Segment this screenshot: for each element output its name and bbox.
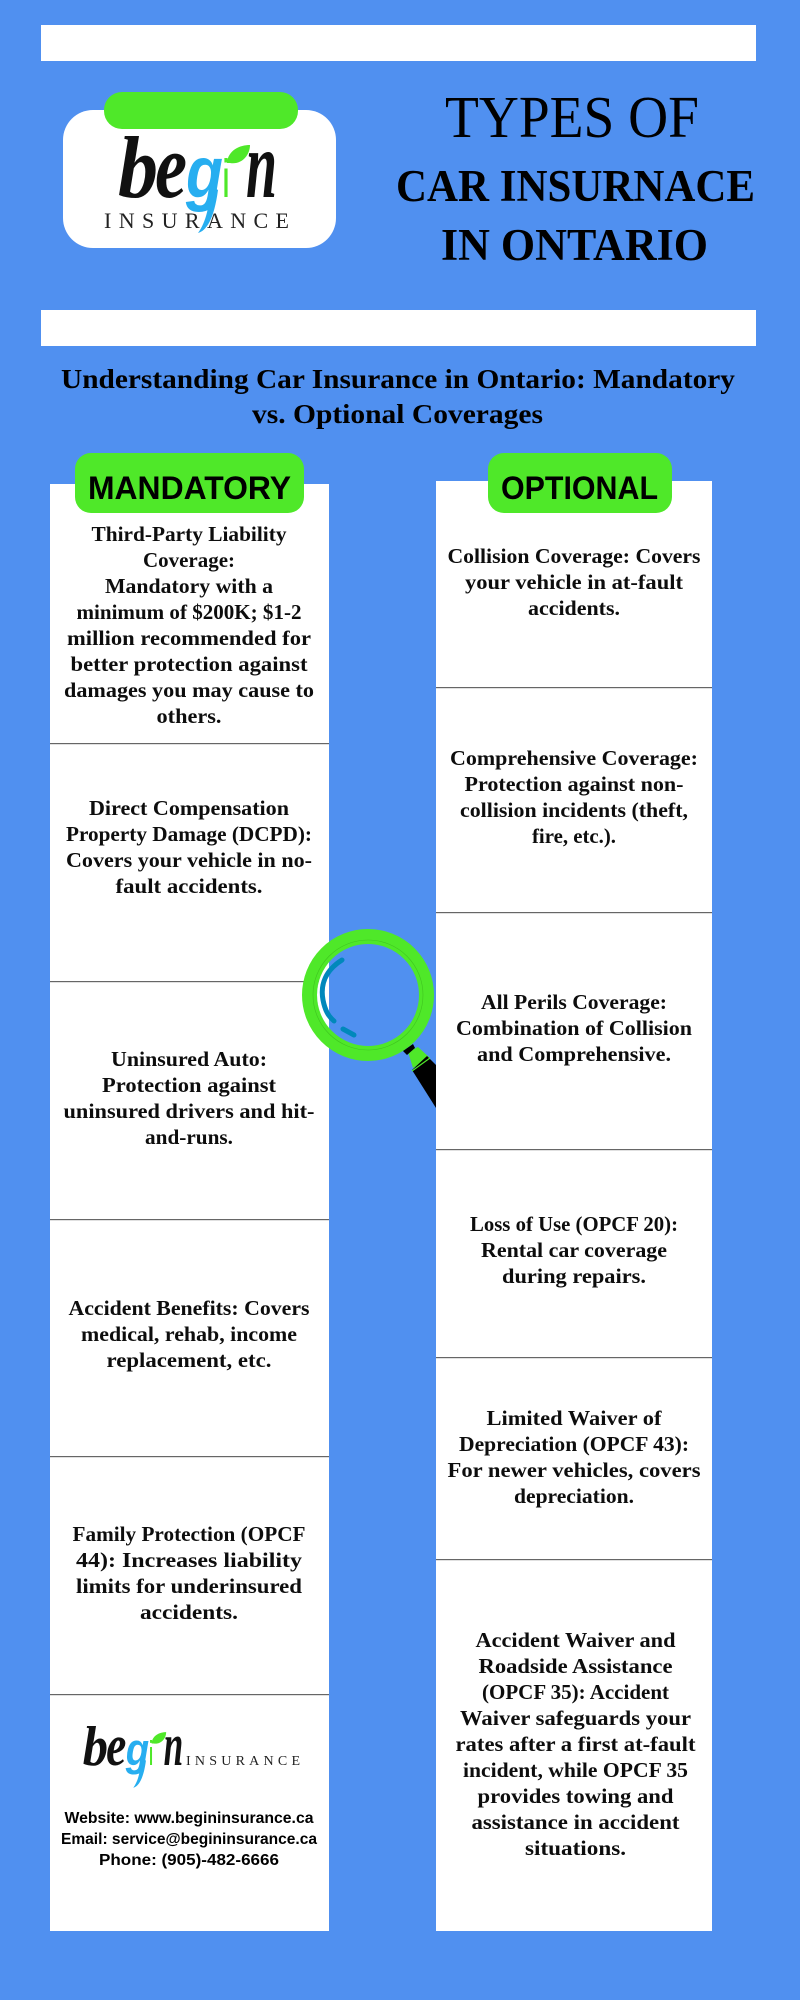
small logo: e (106, 1713, 126, 1778)
text: comprehensive: fire, etc.). (532, 824, 616, 848)
text: comprehensive: Comprehensive Coverage: (450, 746, 698, 770)
text: comprehensive: Protection against non- (464, 772, 684, 796)
text: accident benefits: replacement, etc. (106, 1348, 272, 1372)
lower white bar (41, 310, 756, 346)
icon: magnifying glass (310, 936, 436, 1108)
text: accident waiver and roadside: assistance in accident (472, 1810, 680, 1834)
logo: begin insurance: INSURANCE (104, 208, 289, 233)
text: accident waiver and roadside: rates after a first at-fault (456, 1732, 696, 1756)
text: third-party liability: Third-Party Liability (92, 522, 287, 546)
text: collision: accidents. (528, 596, 620, 620)
text: accident waiver and roadside: (OPCF 35): Accident (482, 1680, 670, 1704)
text: family protection: Family Protection (OPCF (72, 1522, 306, 1546)
logo: begin insurance: n (246, 112, 277, 218)
text: limited waiver: Limited Waiver of (486, 1406, 662, 1430)
text: accident waiver and roadside: Roadside Assistance (478, 1654, 672, 1678)
text: comprehensive: collision incidents (theft, (460, 798, 688, 822)
text: comprehensive (450, 746, 698, 848)
panel: optional (436, 453, 712, 1931)
logo: begin insurance: b (118, 120, 158, 217)
title (396, 84, 755, 270)
top white bar (41, 25, 756, 61)
panel: mandatory (50, 453, 329, 1931)
small logo: b (83, 1716, 108, 1778)
text: loss of use: Loss of Use (OPCF 20): (470, 1212, 678, 1236)
text: family protection: limits for underinsured (76, 1574, 302, 1598)
text: third-party liability: million recommended for (67, 626, 311, 650)
text: third-party liability: Mandatory with a (105, 574, 273, 598)
contact details: Website: www.begininsurance.ca (64, 1810, 314, 1827)
logo: begin insurance: i (222, 149, 230, 209)
small logo: n (164, 1712, 183, 1778)
logo: begin insurance: g (185, 133, 223, 213)
text: third-party liability: minimum of $200K; $1-2 (76, 600, 302, 624)
mandatory heading (75, 453, 304, 513)
text: uninsured auto: and-runs. (145, 1125, 233, 1149)
text: collision (448, 544, 700, 620)
text: limited waiver (448, 1406, 700, 1508)
contact details: Email: service@begininsurance.ca (61, 1831, 317, 1848)
mandatory heading: MANDATORY (88, 470, 291, 506)
optional heading (488, 453, 672, 513)
logo: begin insurance: e (155, 115, 187, 217)
text: third-party liability (64, 522, 314, 728)
small logo word: INSURANCE (186, 1754, 300, 1769)
subtitle (61, 364, 736, 429)
text: accident waiver and roadside: incident, while OPCF 35 (463, 1758, 688, 1782)
text: accident benefits: medical, rehab, income (81, 1322, 297, 1346)
text: dcpd: Direct Compensation (89, 796, 289, 820)
text: family protection: accidents. (140, 1600, 238, 1624)
text: all perils: and Comprehensive. (477, 1042, 671, 1066)
small logo: i (148, 1735, 154, 1773)
text: collision: Collision Coverage: Covers (448, 544, 700, 568)
text: uninsured auto: uninsured drivers and hit- (64, 1099, 314, 1123)
text: accident benefits (68, 1296, 310, 1372)
text: third-party liability: Coverage: (143, 548, 235, 572)
contact details (61, 1810, 317, 1869)
title: TYPES OF (445, 84, 699, 150)
text: limited waiver: depreciation. (514, 1484, 634, 1508)
text: third-party liability: better protection against (70, 652, 308, 676)
text: accident waiver and roadside (456, 1628, 696, 1860)
contact details: Phone: (905)-482-6666 (99, 1852, 279, 1869)
text: accident waiver and roadside: provides towing and (478, 1784, 674, 1808)
text: all perils: All Perils Coverage: (481, 990, 667, 1014)
subtitle: vs. Optional Coverages (252, 399, 543, 429)
text: family protection: 44): Increases liability (76, 1548, 302, 1572)
text: dcpd (66, 796, 312, 898)
text: third-party liability: damages you may cause to (64, 678, 314, 702)
subtitle: Understanding Car Insurance in Ontario: Mandatory (61, 364, 736, 394)
text: all perils (456, 990, 692, 1066)
text: accident waiver and roadside: Waiver safeguards your (460, 1706, 691, 1730)
text: loss of use: Rental car coverage (481, 1238, 667, 1262)
text: loss of use: during repairs. (502, 1264, 646, 1288)
text: dcpd: Property Damage (DCPD): (66, 822, 312, 846)
logo: begin insurance (104, 112, 289, 233)
optional heading: OPTIONAL (501, 470, 658, 506)
text: limited waiver: Depreciation (OPCF 43): (459, 1432, 689, 1456)
text: family protection (72, 1522, 306, 1624)
text: third-party liability: others. (156, 704, 222, 728)
text: uninsured auto: Protection against (102, 1073, 277, 1097)
text: uninsured auto (64, 1047, 314, 1149)
text: loss of use (470, 1212, 678, 1288)
title: IN ONTARIO (441, 220, 708, 270)
text: accident waiver and roadside: situations. (525, 1836, 626, 1860)
small logo: g (125, 1724, 149, 1775)
text: accident benefits: Accident Benefits: Covers (68, 1296, 310, 1320)
text: uninsured auto: Uninsured Auto: (111, 1047, 267, 1071)
logo card (63, 92, 336, 248)
text: collision: your vehicle in at-fault (465, 570, 684, 594)
text: dcpd: Covers your vehicle in no- (66, 848, 312, 872)
text: limited waiver: For newer vehicles, covers (448, 1458, 700, 1482)
title: CAR INSURNACE (396, 161, 755, 211)
text: all perils: Combination of Collision (456, 1016, 692, 1040)
text: dcpd: fault accidents. (116, 874, 262, 898)
small logo (83, 1712, 183, 1788)
text: accident waiver and roadside: Accident Waiver and (476, 1628, 676, 1652)
